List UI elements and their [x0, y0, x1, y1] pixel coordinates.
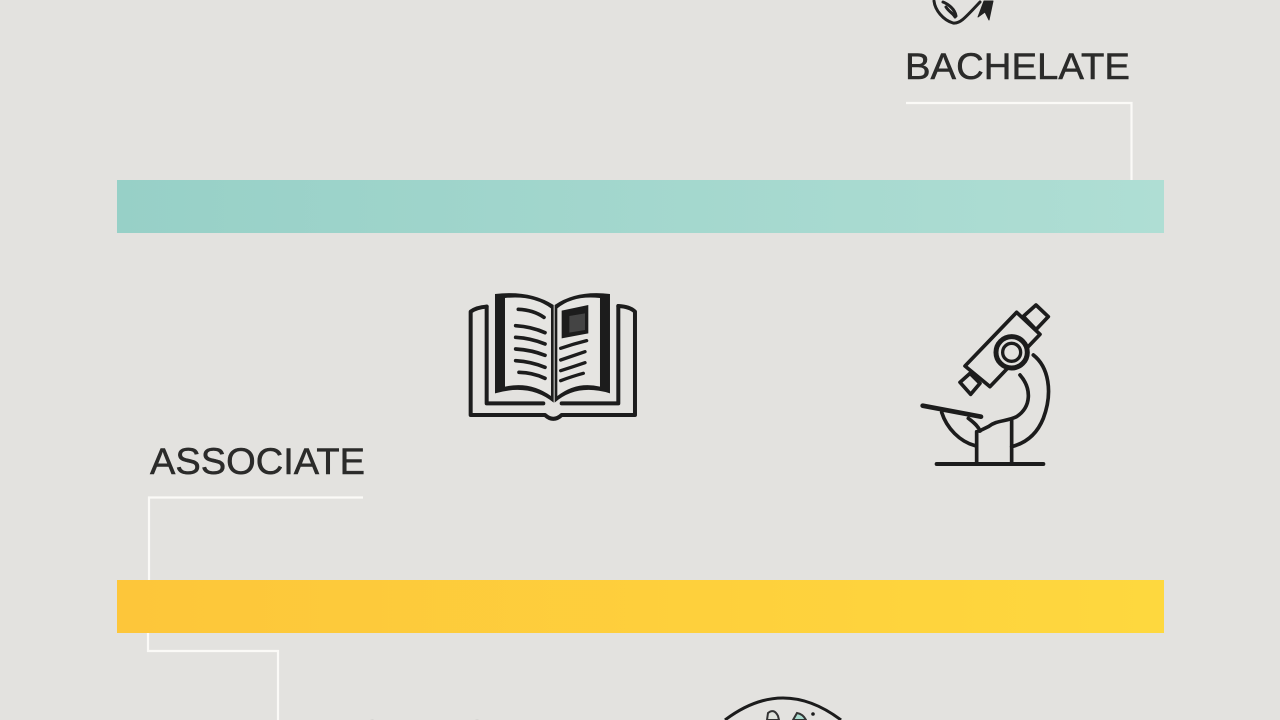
connector: ASSOCIATE to yellow bar [149, 498, 363, 580]
icon: open book [471, 293, 635, 419]
connector: yellow bar to lower label [148, 633, 278, 720]
yellow bar [117, 580, 1164, 633]
icon: diploma scroll (cropped at top) [934, 1, 993, 23]
icon: globe (cropped at bottom) [725, 698, 841, 720]
connector: BACHELATE to teal bar [906, 103, 1132, 180]
teal bar [117, 180, 1164, 233]
label: BACHELATE: BACHELATE [905, 46, 1130, 87]
icon: microscope [923, 305, 1049, 464]
label: ASSOCIATE: ASSOCIATE [150, 441, 365, 482]
